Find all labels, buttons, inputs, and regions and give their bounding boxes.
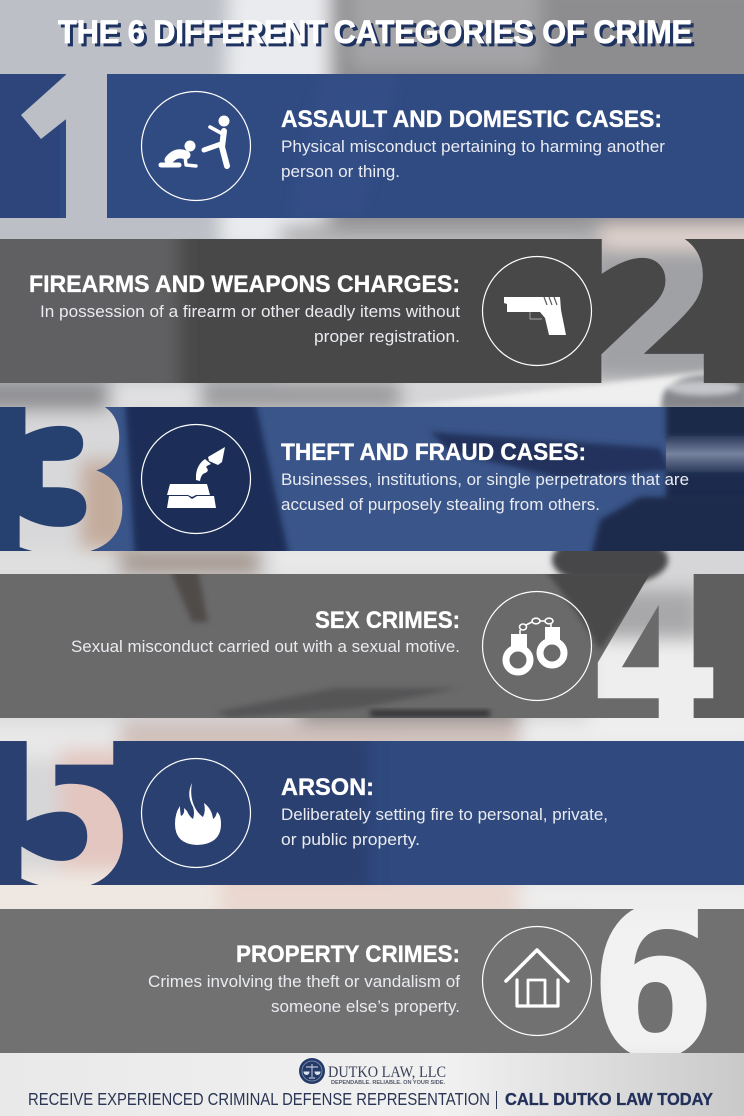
description (281, 806, 608, 849)
heading: ASSAULT AND DOMESTIC CASES: (281, 106, 662, 133)
description: Physical misconduct pertaining to harming another (281, 138, 666, 156)
panel: arson (142, 758, 608, 868)
description: proper registration. (314, 328, 460, 346)
panel: theft (142, 424, 689, 534)
description: accused of purposely stealing from others. (281, 496, 600, 514)
gavel base in gap (552, 534, 668, 586)
icon: hand pen and purse (142, 424, 250, 534)
icon: kicking figure (142, 92, 250, 200)
description (281, 138, 666, 181)
logo (299, 1058, 446, 1086)
band 2 with cut-out numeral 2 (0, 239, 744, 383)
description: Deliberately setting fire to personal, private, (281, 806, 608, 824)
band 6 with cut-out numeral 6 (0, 909, 744, 1053)
icon: handgun (482, 256, 592, 366)
title: THE 6 DIFFERENT CATEGORIES OF CRIME (61, 17, 695, 53)
description: someone else’s property. (271, 998, 460, 1016)
call to action: CALL DUTKO LAW TODAY (505, 1089, 713, 1109)
heading: ARSON: (281, 774, 374, 801)
gavel head top (662, 375, 744, 410)
icon: flame (142, 758, 250, 868)
description: In possession of a firearm or other deadly items without (40, 303, 460, 321)
panel: property (148, 926, 592, 1036)
heading: SEX CRIMES: (315, 607, 460, 634)
icon: handcuffs (482, 592, 592, 700)
panel: sex crimes (71, 592, 592, 700)
company name: DUTKO LAW, LLC (328, 1064, 446, 1081)
band 4 with cut-out numeral 4 (0, 570, 744, 718)
description: Crimes involving the theft or vandalism of (148, 973, 460, 991)
band 3 with cut-out numeral 3 (0, 407, 744, 551)
panel: firearms (29, 256, 592, 366)
description: person or thing. (281, 163, 400, 181)
band 1 with cut-out numeral 1 (0, 74, 744, 218)
tagline: DEPENDABLE. RELIABLE. ON YOUR SIDE. (331, 1080, 446, 1086)
heading: PROPERTY CRIMES: (236, 941, 460, 968)
description (281, 471, 689, 514)
heading: THEFT AND FRAUD CASES: (281, 439, 586, 466)
icon: house (482, 926, 592, 1036)
icon: scales seal (299, 1058, 325, 1084)
description (148, 973, 460, 1016)
call to action: RECEIVE EXPERIENCED CRIMINAL DEFENSE REPRESENTATION (28, 1089, 490, 1109)
description: Sexual misconduct carried out with a sexual motive. (71, 638, 460, 656)
description (40, 303, 460, 346)
white desk wedge (395, 372, 744, 407)
heading: FIREARMS AND WEAPONS CHARGES: (29, 271, 460, 298)
description: Businesses, institutions, or single perpetrators that are (281, 471, 689, 489)
band 5 with cut-out numeral 5 (0, 741, 744, 885)
title: THE 6 DIFFERENT CATEGORIES OF CRIME (58, 14, 692, 50)
description: or public property. (281, 831, 420, 849)
panel: assault (142, 92, 666, 200)
